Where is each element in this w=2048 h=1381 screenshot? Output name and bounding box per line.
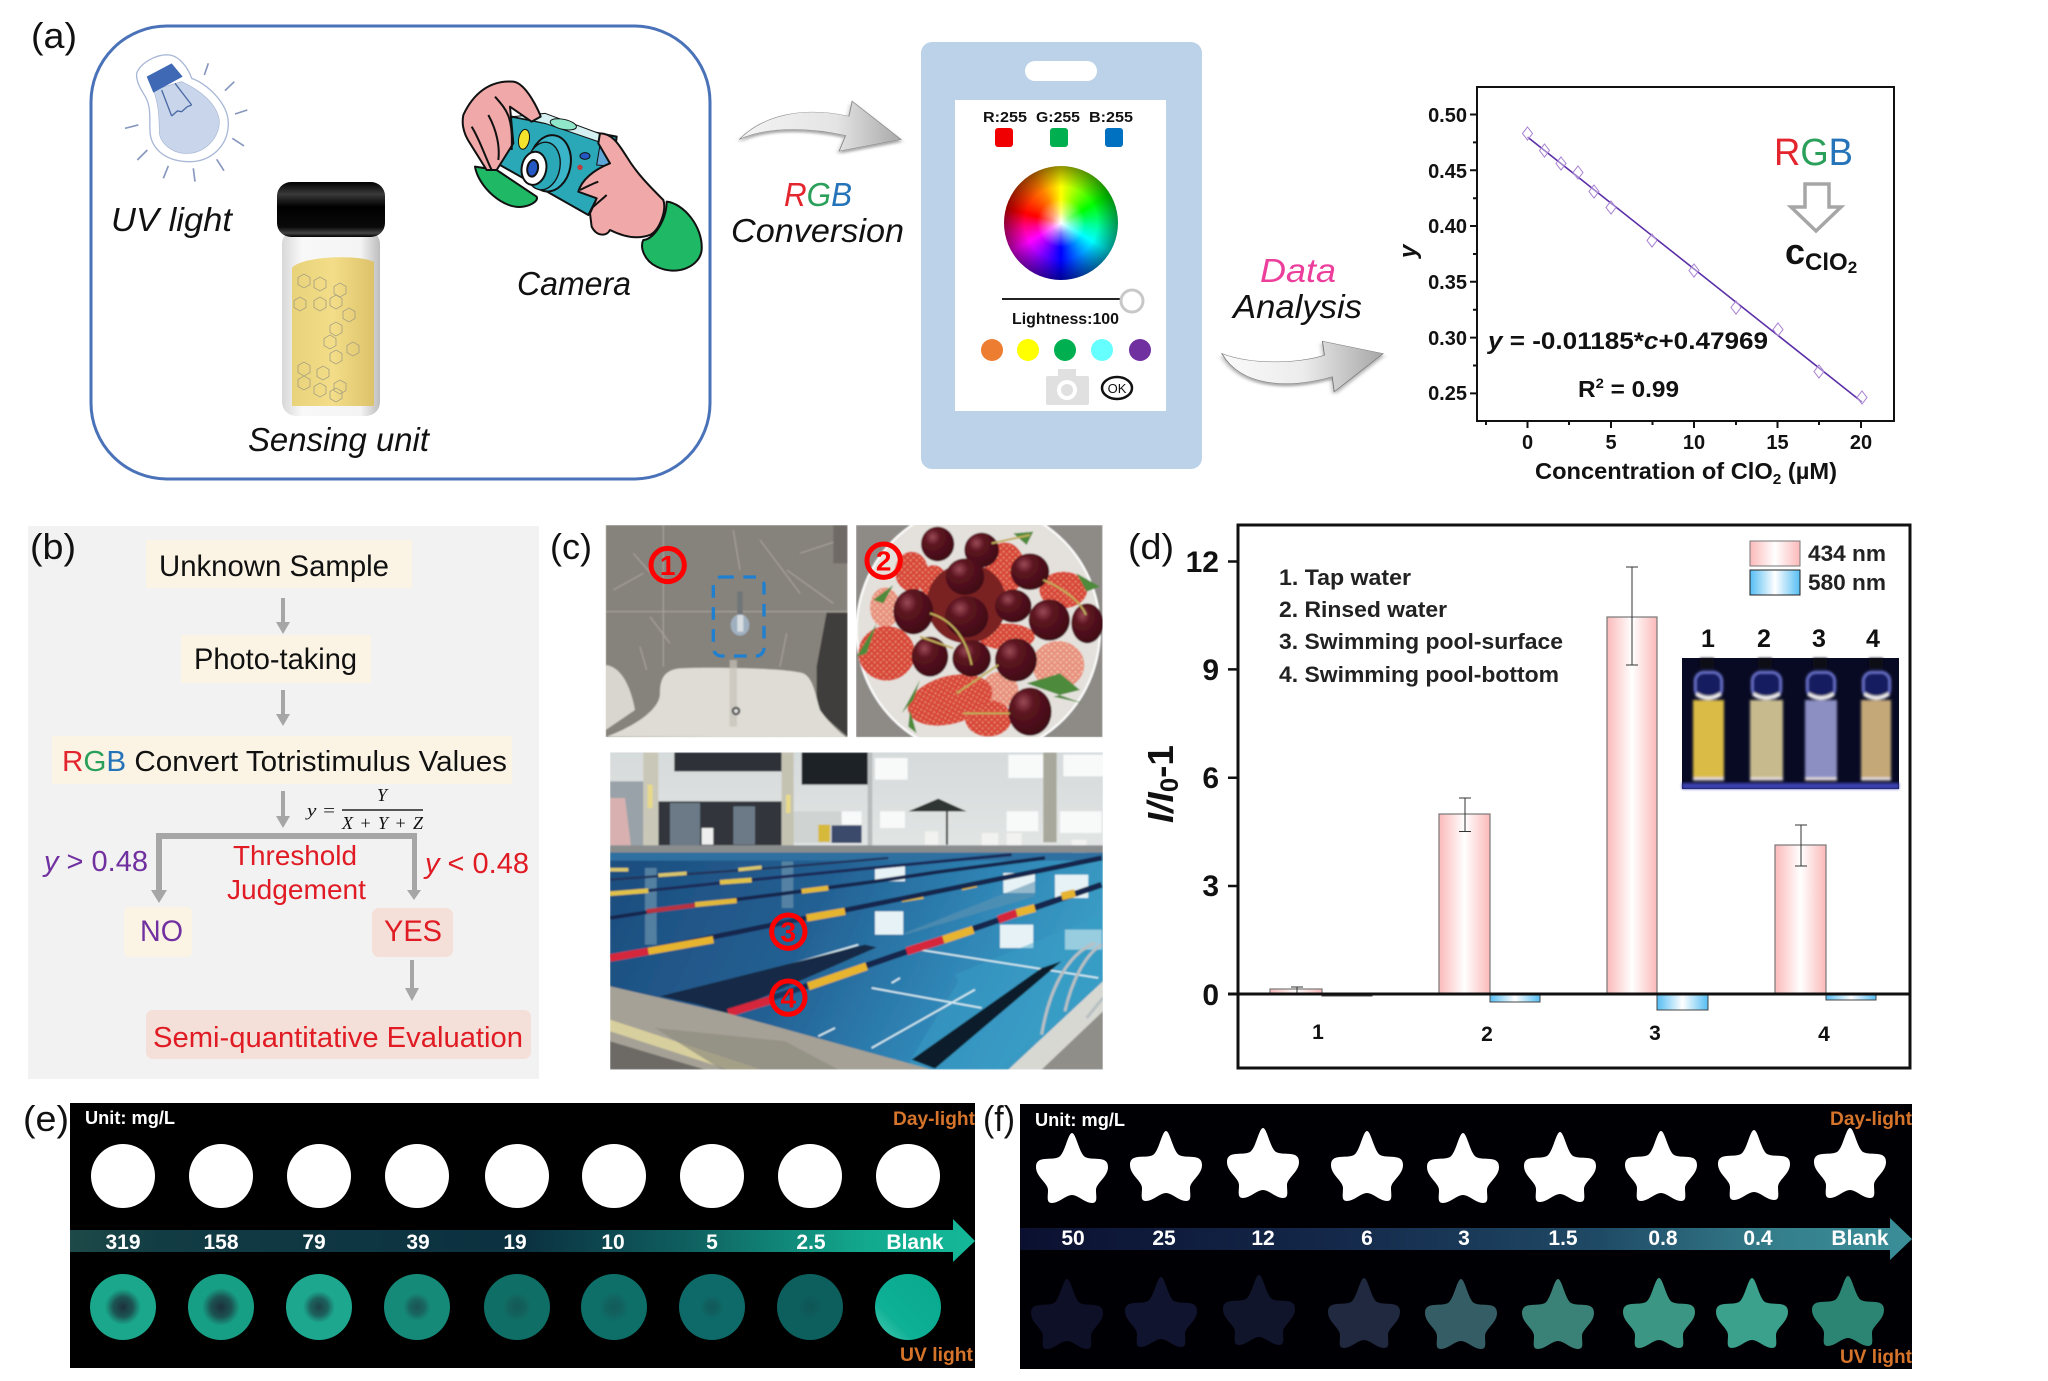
text: Data Analysis xyxy=(1231,252,1362,325)
UV light label: UV light xyxy=(1840,1347,1913,1368)
chart: y vs ClO2 concentration xyxy=(1395,87,1894,488)
panel: phone color app xyxy=(921,42,1202,469)
y axis title: 0 xyxy=(1156,778,1184,792)
dark lane band xyxy=(660,945,877,1013)
y axis title: -1 xyxy=(1140,745,1181,778)
580 nm bars xyxy=(1322,994,1876,1010)
bar chart (d) xyxy=(1140,525,1910,1068)
icon: camera held in hands xyxy=(463,82,702,271)
x axis tick labels: 15 xyxy=(1766,432,1789,454)
error bars xyxy=(1291,567,1807,994)
concentration values: 0.8 xyxy=(1648,1227,1678,1250)
daylight circles xyxy=(91,1144,940,1208)
x axis title: (µM) xyxy=(1781,458,1837,484)
water reflections xyxy=(875,866,1102,950)
x axis tick labels: 0 xyxy=(1522,432,1533,454)
panel label (b): (b) xyxy=(30,526,76,567)
panel label (c): (c) xyxy=(550,526,592,567)
cherries xyxy=(893,527,1103,736)
concentration arrow xyxy=(70,1219,975,1262)
concentration values: 3 xyxy=(1458,1227,1470,1250)
concentration values: 50 xyxy=(1061,1227,1085,1250)
concentration values: 0.4 xyxy=(1743,1227,1773,1250)
y axis tick labels: 0.30 xyxy=(1428,328,1467,350)
text: UV light: UV light xyxy=(111,201,234,238)
concentration values: 10 xyxy=(601,1231,625,1254)
arrow: to photo-taking xyxy=(276,598,290,634)
y tick labels: 9 xyxy=(1202,654,1219,687)
category labels: 1 xyxy=(1312,1021,1324,1044)
formula: Y xyxy=(377,785,389,805)
panel label (f): (f) xyxy=(983,1098,1015,1139)
concentration values: 25 xyxy=(1152,1227,1176,1250)
equation: y = -0.01185* c+0.47969 xyxy=(1487,328,1768,355)
pool edge xyxy=(610,845,1103,853)
concentration values: 1.5 xyxy=(1548,1227,1578,1250)
umbrella xyxy=(908,799,967,811)
molecular structure in vial xyxy=(294,274,359,402)
arrow: phone to data analysis xyxy=(1222,341,1383,392)
sample legend: 1. Tap water xyxy=(1279,565,1411,590)
UV circles xyxy=(90,1274,941,1340)
y tick labels: 6 xyxy=(1202,762,1219,795)
sample legend: 2. Rinsed water xyxy=(1279,597,1447,622)
concentration values: 39 xyxy=(406,1231,430,1254)
marker 1: 1 xyxy=(660,550,675,581)
text: Sensing unit: Sensing unit xyxy=(248,421,431,458)
panel: star paper strips (f) xyxy=(1020,1104,1913,1369)
deck xyxy=(610,986,932,1070)
icon: gray camera button xyxy=(1046,369,1089,405)
sample legend: 3. Swimming pool-surface xyxy=(1279,629,1563,654)
RGB readouts xyxy=(983,109,1133,147)
RGB readouts: R:255 xyxy=(983,109,1027,126)
x axis tick labels xyxy=(1522,432,1872,454)
result: NO: NO xyxy=(140,915,183,948)
y axis ticks xyxy=(1470,114,1861,428)
result: YES xyxy=(372,908,453,957)
inset vial numbers: 2 xyxy=(1757,625,1771,653)
step: Unknown Sample: Unknown Sample xyxy=(159,550,389,583)
x axis tick labels: 20 xyxy=(1850,432,1872,454)
sample legend xyxy=(1279,565,1563,687)
c ClO2 label: 2 xyxy=(1848,258,1857,277)
concentration values: Blank xyxy=(886,1231,944,1254)
concentration values: 6 xyxy=(1361,1227,1373,1250)
step: Photo-taking xyxy=(181,635,371,683)
RGB readouts: G:255 xyxy=(1036,109,1080,126)
text: Threshold Judgement: Judgement xyxy=(227,874,366,905)
hollow down arrow xyxy=(1791,184,1841,231)
text: Threshold Judgement: Threshold xyxy=(233,840,357,871)
x axis title: 2 xyxy=(1773,471,1781,488)
text: RGB Conversion xyxy=(731,176,904,249)
y axis tick labels: 0.25 xyxy=(1428,383,1467,405)
arrow: to threshold xyxy=(276,791,290,828)
fit line xyxy=(1528,137,1862,402)
y axis tick labels xyxy=(1428,105,1467,405)
y axis title: y xyxy=(1395,243,1422,259)
R squared: 2 xyxy=(1596,375,1604,391)
lightness slider: Lightness:100 xyxy=(1012,311,1119,328)
preset color dots xyxy=(981,339,1151,361)
y axis title: I/I xyxy=(1140,791,1181,823)
lightness slider xyxy=(1002,290,1143,328)
dashed highlight xyxy=(713,577,764,656)
R squared: R xyxy=(1578,376,1595,402)
stems xyxy=(920,535,1086,713)
unit label: Unit: mg/L xyxy=(1035,1110,1125,1130)
category labels xyxy=(1312,1021,1830,1046)
result: Semi-quantitative Evaluation xyxy=(146,1010,531,1059)
result: NO xyxy=(124,907,192,957)
marker 2: 2 xyxy=(876,546,891,577)
category labels: 3 xyxy=(1649,1022,1661,1045)
panel label (a): (a) xyxy=(31,15,77,56)
icon: OK button: OK xyxy=(1108,381,1127,396)
photo 3: swimming pool xyxy=(610,752,1103,1070)
result: YES: YES xyxy=(384,915,442,948)
y ticks xyxy=(1228,562,1238,886)
pool lane lines xyxy=(793,942,1100,1050)
zero axis xyxy=(1228,992,1910,996)
inset vial numbers: 1 xyxy=(1701,625,1715,653)
y axis tick labels: 0.45 xyxy=(1428,161,1467,183)
y tick labels: 12 xyxy=(1186,546,1219,579)
inset vial numbers: 4 xyxy=(1866,625,1880,653)
unit label: Unit: mg/L xyxy=(85,1108,175,1128)
marker 1 xyxy=(651,548,684,582)
day-light label: Day-light xyxy=(893,1109,976,1130)
concentration values xyxy=(1061,1227,1889,1250)
wavelength legend xyxy=(1750,541,1886,595)
arrow: to RGB convert xyxy=(276,690,290,726)
x axis title: Concentration of ClO xyxy=(1535,458,1766,484)
UV stars xyxy=(1031,1275,1884,1349)
inset vial numbers xyxy=(1701,625,1880,653)
icon: OK button xyxy=(1102,377,1132,399)
building interior left xyxy=(674,752,782,771)
arrow: to evaluation xyxy=(405,960,419,1001)
marker 2 xyxy=(867,544,900,577)
RGB label: RGB xyxy=(1774,132,1853,174)
icon: UV light bulb xyxy=(125,55,247,182)
y axis tick labels: 0.50 xyxy=(1428,105,1467,127)
concentration arrow xyxy=(1020,1218,1912,1260)
marker 4: 4 xyxy=(781,983,797,1014)
text: Threshold Judgement xyxy=(227,840,366,905)
formula: X + Y + Z xyxy=(341,813,424,833)
panel label (d): (d) xyxy=(1128,526,1174,567)
concentration values: 79 xyxy=(302,1231,326,1254)
icon: sensing vial xyxy=(277,182,385,416)
concentration values xyxy=(105,1231,944,1254)
step: RGB Convert: RGB Convert Totristimulus Values xyxy=(62,746,507,778)
inset photo of vials under UV xyxy=(1682,658,1899,789)
y tick labels: 3 xyxy=(1202,870,1219,903)
434 nm bars xyxy=(1270,617,1826,994)
text: RGB Conversion: Conversion xyxy=(731,212,904,249)
photo 2: fruit plate xyxy=(856,525,1103,738)
concentration values: 5 xyxy=(706,1231,718,1254)
text: Camera: Camera xyxy=(517,265,631,302)
data points xyxy=(1522,127,1867,404)
panel label (e): (e) xyxy=(23,1098,69,1139)
text: Data Analysis: Data xyxy=(1260,252,1336,289)
strawberries xyxy=(858,542,1087,737)
leaves xyxy=(857,532,1100,733)
x axis tick labels: 5 xyxy=(1605,432,1617,454)
marker 3 xyxy=(772,915,805,948)
sample legend: 4. Swimming pool-bottom xyxy=(1279,662,1559,687)
category labels: 2 xyxy=(1481,1023,1493,1046)
step: RGB Convert xyxy=(52,736,512,784)
photo 1: tap water wall xyxy=(606,525,848,737)
concentration values: 12 xyxy=(1251,1227,1275,1250)
category labels: 4 xyxy=(1818,1023,1830,1046)
branch label: y less: y < 0.48 xyxy=(423,848,529,880)
marker 4 xyxy=(772,981,805,1014)
text: Data Analysis: Analysis xyxy=(1231,288,1362,325)
UV light label: UV light xyxy=(900,1345,974,1366)
R squared: = 0.99 xyxy=(1604,376,1679,402)
wavelength legend: 434 nm xyxy=(1808,541,1886,566)
concentration values: 2.5 xyxy=(796,1231,826,1254)
branch label: y greater: y > 0.48 xyxy=(42,846,148,878)
c ClO2 label: ClO xyxy=(1805,249,1848,276)
panel: flowchart (b) xyxy=(28,526,539,1079)
x axis tick labels: 10 xyxy=(1683,432,1705,454)
tile band xyxy=(912,961,1062,1069)
y axis tick labels: 0.40 xyxy=(1428,216,1467,238)
arrow: setup to RGB conversion xyxy=(739,101,901,151)
result: Semi-quantitative Evaluation: Semi-quantitative Evaluation xyxy=(153,1022,523,1054)
wavelength legend: 580 nm xyxy=(1808,570,1886,595)
panel: circular paper strips (e) xyxy=(70,1103,976,1368)
color wheel xyxy=(1004,166,1118,280)
concentration values: Blank xyxy=(1831,1227,1889,1250)
c ClO2 label: c xyxy=(1785,231,1805,272)
step: Photo-taking: Photo-taking xyxy=(194,643,357,676)
concentration values: 158 xyxy=(203,1231,239,1254)
decision bracket arrows xyxy=(151,833,421,903)
y axis tick labels: 0.35 xyxy=(1428,272,1467,294)
panel: sensing setup rounded frame xyxy=(91,26,710,479)
concentration values: 19 xyxy=(503,1231,527,1254)
lane ropes xyxy=(610,855,1102,1013)
windows xyxy=(842,755,1103,833)
marker 3: 3 xyxy=(781,917,796,948)
daylight stars xyxy=(1036,1128,1886,1203)
text: RGB Conversion: RGB xyxy=(784,176,852,213)
step: Unknown Sample xyxy=(146,540,412,588)
formula: y = xyxy=(305,801,336,820)
RGB readouts: B:255 xyxy=(1089,109,1133,126)
y tick labels xyxy=(1186,546,1219,1012)
y tick labels: 0 xyxy=(1202,979,1219,1012)
ladder rails xyxy=(1042,943,1103,1035)
inset vial numbers: 3 xyxy=(1812,625,1826,653)
concentration values: 319 xyxy=(105,1231,141,1254)
day-light label: Day-light xyxy=(1830,1109,1913,1130)
formula xyxy=(305,785,424,833)
